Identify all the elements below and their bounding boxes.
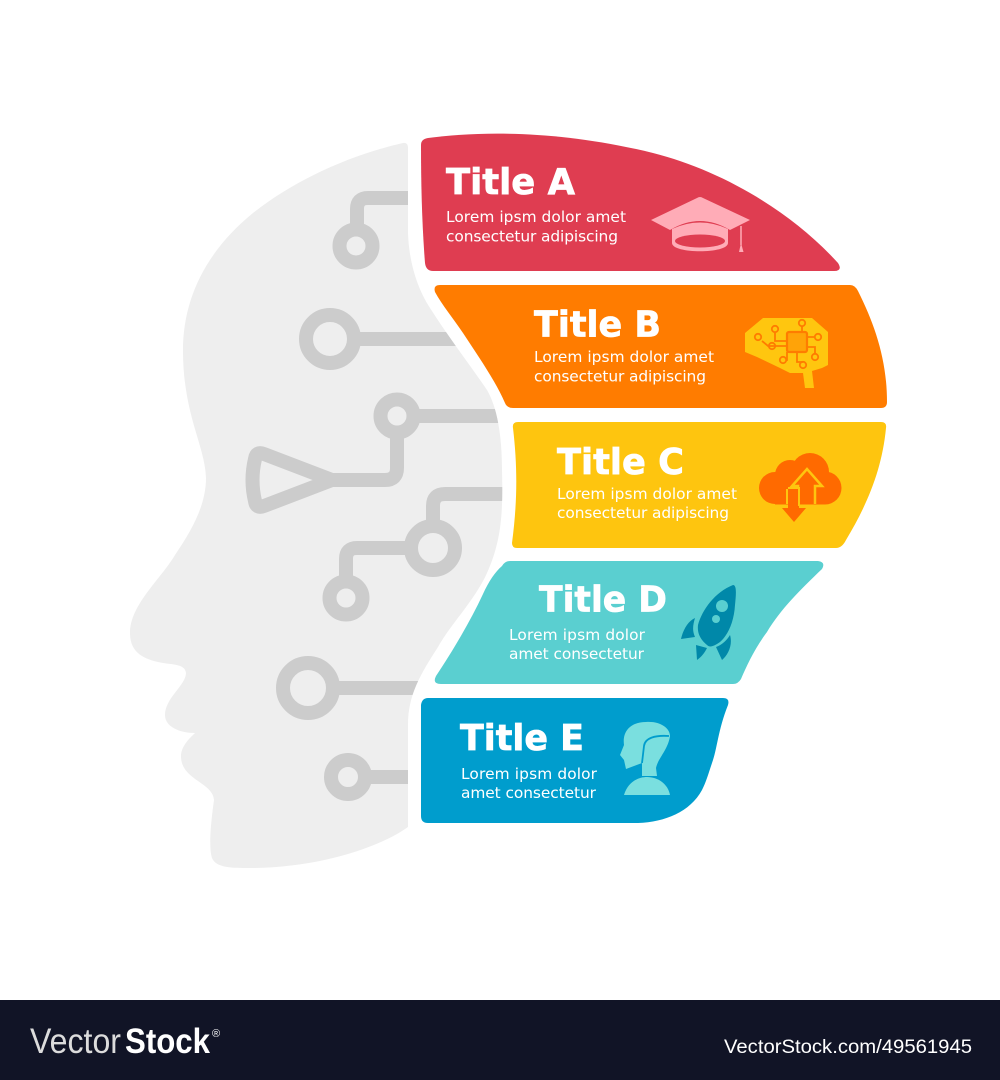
icon: graduation cap <box>651 197 750 252</box>
text B <box>534 348 714 386</box>
text D <box>509 626 646 663</box>
brand: Stock <box>125 1022 210 1061</box>
text C: Lorem ipsm dolor amet <box>557 485 737 503</box>
panel A <box>421 134 840 271</box>
panel C <box>512 422 886 548</box>
title E: Title E <box>460 718 584 759</box>
icon: rocket <box>681 585 736 660</box>
text D: Lorem ipsm dolor <box>509 626 646 644</box>
text A <box>446 208 626 246</box>
icon: brain chip <box>745 318 828 388</box>
text E: amet consectetur <box>461 784 597 802</box>
text E: Lorem ipsm dolor <box>461 765 598 783</box>
icon: head profile <box>620 722 670 795</box>
title C: Title C <box>557 442 684 483</box>
panel D <box>435 561 823 684</box>
text A: consectetur adipiscing <box>446 228 618 246</box>
text A: Lorem ipsm dolor amet <box>446 208 626 226</box>
title A: Title A <box>446 162 575 203</box>
panel B <box>435 285 887 408</box>
title B: Title B <box>534 304 661 346</box>
circuit lines <box>252 198 510 794</box>
brand: ® <box>212 1028 220 1040</box>
head silhouette <box>130 143 510 868</box>
text B: consectetur adipiscing <box>534 368 706 386</box>
url: VectorStock.com/49561945 <box>724 1037 972 1058</box>
text D: amet consectetur <box>509 645 645 663</box>
text C <box>557 485 737 522</box>
footer bar <box>0 1000 1000 1080</box>
text B: Lorem ipsm dolor amet <box>534 348 714 366</box>
text E <box>461 765 598 802</box>
panel E <box>421 698 728 823</box>
title D: Title D <box>539 580 667 620</box>
text C: consectetur adipiscing <box>557 504 729 522</box>
brand: Vector <box>30 1022 121 1061</box>
icon: cloud transfer <box>759 453 842 522</box>
brand <box>30 1022 220 1061</box>
